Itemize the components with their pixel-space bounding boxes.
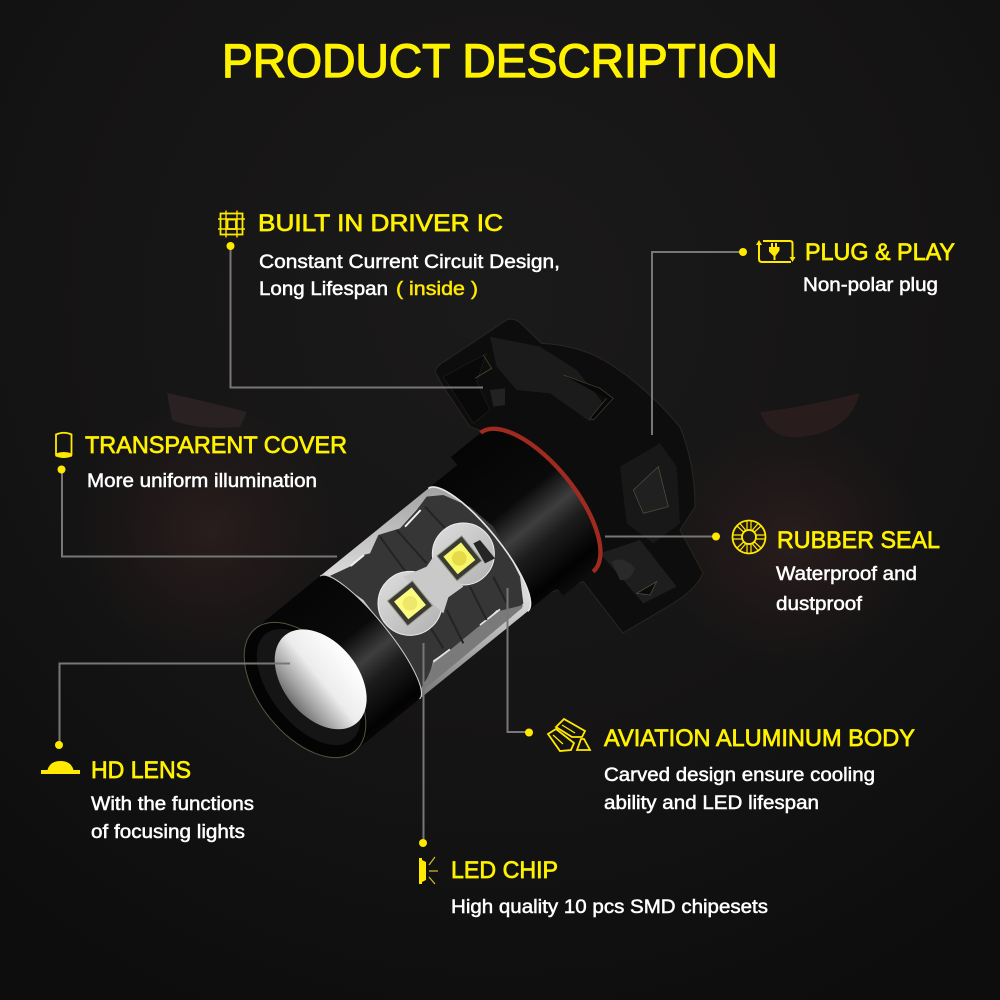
description: body: Carved design ensure cooling	[604, 764, 875, 786]
callout: rubber seal	[605, 520, 940, 615]
description: body: ability and LED lifespan	[604, 792, 819, 814]
dot: body	[525, 728, 533, 736]
lens glass	[256, 612, 385, 747]
description: seal: dustproof	[776, 593, 863, 615]
flange	[451, 409, 623, 596]
icon: circuit chip	[218, 210, 245, 238]
dot: seal	[712, 532, 720, 540]
LED chip A	[437, 536, 482, 581]
bulb rear body	[314, 409, 623, 707]
leader line: seal	[605, 536, 714, 538]
leader line: chip	[422, 643, 424, 840]
callout: plug and play	[652, 239, 955, 435]
rubber ring	[481, 409, 623, 572]
icon: plug	[756, 240, 796, 262]
callout: aviation aluminum body	[508, 588, 915, 814]
description: lens: of focusing lights	[91, 821, 245, 843]
icon: metal ingots	[548, 719, 590, 751]
leader line: lens	[60, 664, 290, 742]
LED bulb photo illustration	[220, 319, 703, 780]
dot: lens	[55, 741, 63, 749]
dot: driver IC	[226, 242, 234, 250]
front barrel	[255, 565, 434, 751]
heading: plug and play: PLUG & PLAY	[805, 239, 955, 266]
socket	[435, 319, 703, 633]
PCB board	[378, 523, 495, 635]
dot: chip	[419, 839, 427, 847]
callout: built in driver IC	[218, 210, 560, 388]
icon: LED emitter	[419, 857, 438, 884]
bulb front body	[220, 475, 545, 780]
leader line: body	[508, 588, 526, 732]
title: PRODUCT DESCRIPTION	[222, 34, 778, 87]
rear barrel	[426, 461, 562, 613]
LED chip B	[387, 581, 433, 626]
description: driver IC: ( inside )	[396, 278, 478, 300]
heading: LED chip: LED CHIP	[451, 857, 558, 884]
leader line: cover	[62, 472, 337, 556]
description: chip: High quality 10 pcs SMD chipesets	[451, 896, 768, 918]
heatsink	[328, 495, 523, 692]
leader line: driver IC	[230, 248, 483, 388]
description: lens: With the functions	[91, 793, 254, 815]
callout: transparent cover	[56, 432, 347, 556]
heading: rubber seal: RUBBER SEAL	[777, 527, 940, 554]
description: seal: Waterproof and	[776, 563, 917, 585]
icon: lens dome	[41, 761, 80, 774]
glass cover	[320, 475, 545, 699]
leader line: plug	[652, 252, 740, 435]
icon: transparent cylinder	[56, 433, 72, 458]
heading: built in driver IC: BUILT IN DRIVER IC	[258, 210, 503, 237]
description: cover: More uniform illumination	[87, 470, 317, 492]
front face	[220, 600, 390, 780]
description: driver IC: Constant Current Circuit Design,	[259, 251, 560, 273]
description: lens	[91, 793, 254, 843]
description: plug: Non-polar plug	[803, 274, 938, 296]
description: driver IC	[259, 251, 560, 300]
description: seal	[776, 563, 917, 615]
heading: transparent cover: TRANSPARENT COVER	[85, 432, 347, 459]
callout: HD lens	[41, 664, 290, 843]
heading: HD lens: HD LENS	[91, 757, 191, 784]
dot: plug	[739, 248, 747, 256]
heading: aviation aluminum body: AVIATION ALUMINUM BODY	[604, 725, 915, 752]
dot: cover	[58, 466, 66, 474]
description: body	[604, 764, 875, 814]
icon: seal ring	[732, 520, 766, 554]
description: driver IC: Long Lifespan	[259, 278, 388, 300]
callout: LED chip	[419, 643, 768, 918]
